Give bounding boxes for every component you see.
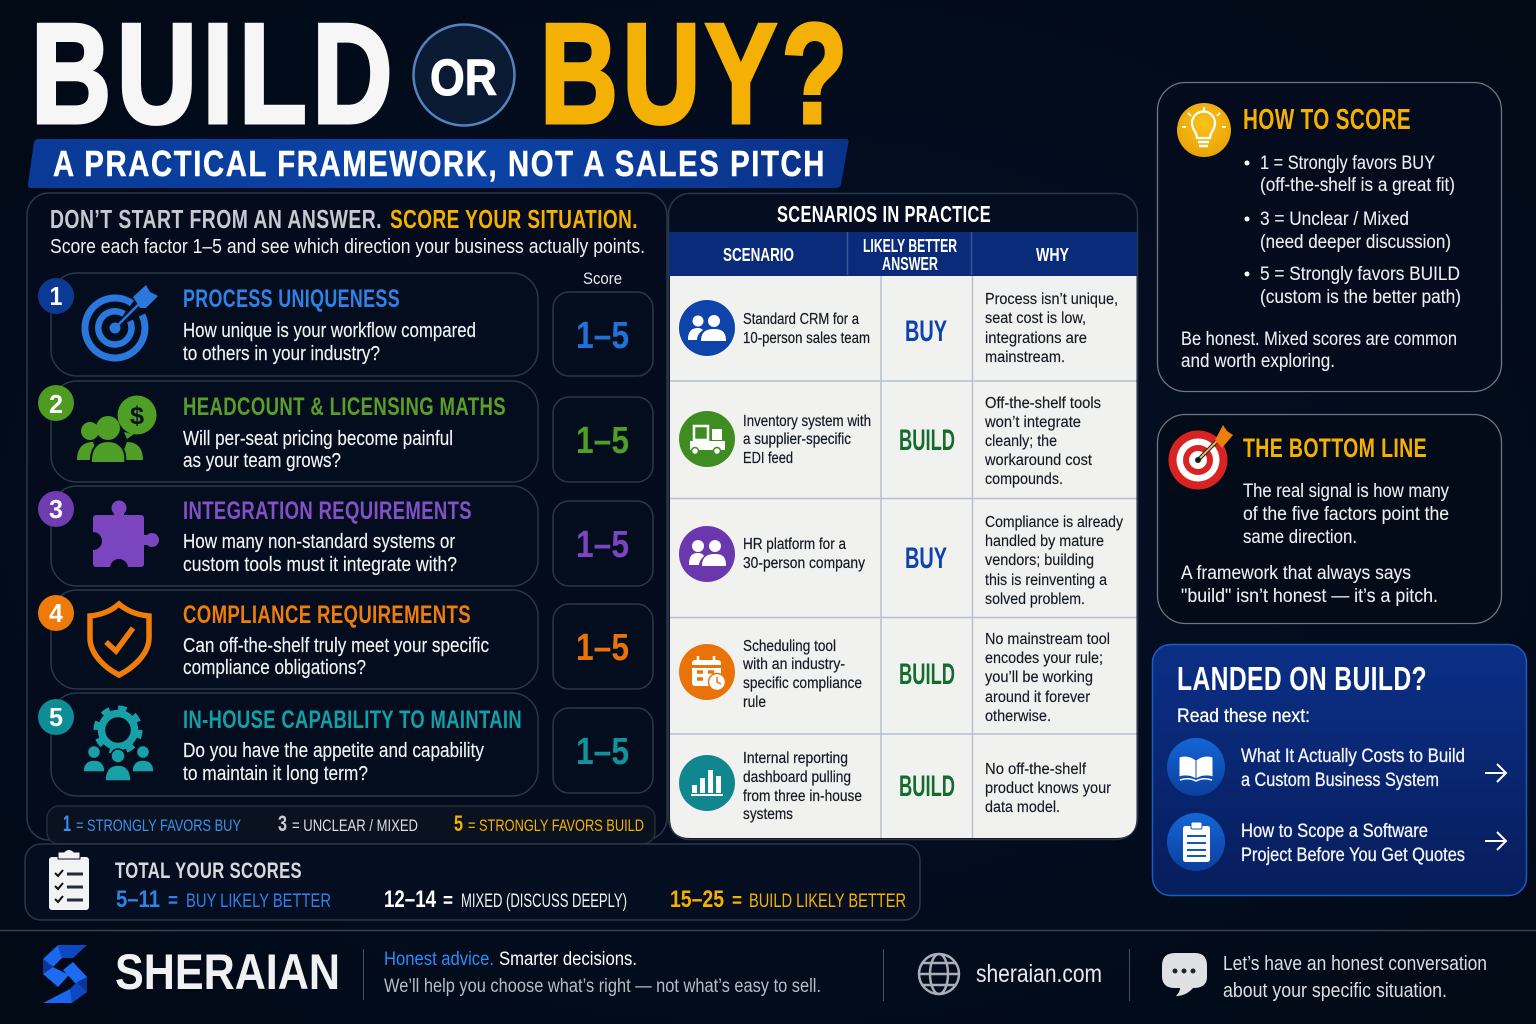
factor 1: process uniqueness (38, 273, 538, 376)
row 5: reporting dashboard: Internal reporting (743, 750, 848, 767)
factor 4: compliance requirements: COMPLIANCE REQUIREMENTS (183, 601, 471, 629)
factor 3: integration requirements (38, 486, 538, 586)
row 1: CRM (679, 291, 1118, 366)
subtitle banner (28, 139, 849, 188)
panel: total your scores: 15–25 (670, 886, 724, 913)
table title: SCENARIOS IN PRACTICE (777, 201, 991, 227)
table header row: SCENARIO (723, 245, 794, 265)
factor 4: compliance requirements: Can off-the-shelf truly meet your specific (183, 635, 489, 657)
footer: sheraian.com (976, 960, 1102, 988)
row 3: HR platform: BUY (905, 542, 947, 575)
icon: users blue (679, 300, 735, 356)
icon: globe (919, 954, 959, 994)
row 5: reporting dashboard (679, 750, 1111, 823)
icon: bullseye with dart (1168, 425, 1233, 490)
panel: how to score: and worth exploring. (1181, 351, 1335, 372)
panel: landed on build: Read these next: (1177, 706, 1310, 727)
panel: the bottom line: same direction. (1243, 527, 1357, 548)
row 2: inventory: cleanly; the (985, 433, 1057, 450)
link 1: costs to build (1167, 738, 1506, 796)
row 3: HR platform: HR platform for a (743, 536, 846, 553)
panel: the bottom line: of the five factors point the (1243, 504, 1449, 525)
row 4: scheduling tool: with an industry- (742, 656, 845, 673)
icon: team and dollar: $ (130, 402, 144, 430)
factor 4: compliance requirements: compliance obligations? (183, 657, 366, 679)
tagline (384, 949, 821, 997)
row 2: inventory: workaround cost (984, 452, 1093, 469)
factor 2: headcount and licensing (38, 381, 538, 482)
panel: total your scores: TOTAL YOUR SCORES (115, 858, 302, 883)
icon: clipboard (1167, 813, 1225, 871)
row 3: HR platform: solved problem. (985, 591, 1085, 608)
table header row: LIKELY BETTER (863, 236, 957, 256)
panel: the bottom line (1158, 414, 1502, 624)
row 2: inventory: a supplier-specific (743, 431, 851, 448)
score legend bar (47, 806, 655, 844)
panel: how to score (1158, 82, 1502, 392)
link 1: costs to build: What It Actually Costs to Build (1241, 746, 1465, 767)
row 4: scheduling tool: Scheduling tool (743, 638, 836, 655)
row 5: reporting dashboard: product knows your (985, 780, 1111, 797)
row 4: scheduling tool: you’ll be working (985, 669, 1093, 686)
row 2: inventory (679, 395, 1101, 488)
table header row (669, 232, 1137, 276)
row 2: inventory: compounds. (985, 471, 1063, 488)
row 4: scheduling tool: No mainstream tool (985, 631, 1110, 648)
scoring key list: 5 = Strongly favors BUILD (1260, 264, 1460, 285)
subtitle banner: A PRACTICAL FRAMEWORK, NOT A SALES PITCH (53, 143, 826, 184)
number badge 4: 4 (49, 598, 64, 628)
footer: Let’s have an honest conversation (1223, 953, 1487, 975)
factor 1: process uniqueness: How unique is your workflow compared (183, 320, 476, 342)
icon: forklift (679, 411, 735, 467)
scoring key list: 1 = Strongly favors BUY (1260, 153, 1435, 174)
number badge 5: 5 (49, 702, 63, 732)
OR badge (414, 24, 514, 126)
icon: target with arrow (85, 285, 158, 358)
factor 2: headcount and licensing: HEADCOUNT & LICENSING MATHS (183, 393, 506, 421)
score box 5 (553, 708, 653, 793)
scoring key list: 3 = Unclear / Mixed (1260, 209, 1409, 230)
icon: gear and people (83, 708, 154, 781)
row 5: reporting dashboard: No off-the-shelf (985, 761, 1087, 778)
row 4: scheduling tool: BUILD (899, 658, 955, 691)
factor 2: headcount and licensing: as your team grows? (183, 450, 341, 472)
score box 3: 1–5 (576, 524, 629, 566)
icon: checklist clipboard (49, 850, 89, 910)
number badge 5 (38, 699, 74, 735)
score box 1 (553, 292, 653, 376)
panel: the bottom line: A framework that always says (1181, 563, 1411, 584)
row 5: reporting dashboard: BUILD (899, 770, 955, 803)
factor 5: in-house capability: to maintain it long term? (183, 763, 368, 785)
row 2: inventory: BUILD (899, 424, 955, 457)
logo mark (43, 945, 87, 1003)
panel: total your scores: BUILD LIKELY BETTER (749, 891, 906, 912)
row 2: inventory: EDI feed (743, 450, 793, 467)
factor 3: integration requirements: custom tools must it integrate with? (183, 554, 457, 576)
panel: total your scores: MIXED (DISCUSS DEEPLY) (461, 891, 627, 912)
panel: total your scores: BUY LIKELY BETTER (186, 891, 331, 912)
row 5: reporting dashboard: systems (743, 806, 793, 823)
factor 4: compliance requirements (38, 590, 538, 689)
row 4: scheduling tool: around it forever (985, 689, 1090, 706)
icon: calendar and clock (679, 644, 735, 700)
score legend bar: 1 (63, 811, 71, 836)
row 1: CRM: Standard CRM for a (743, 311, 859, 328)
icon: speech bubble (1162, 953, 1207, 996)
icon: open book (1167, 738, 1225, 796)
panel: scoring factors (27, 193, 667, 844)
row 4: scheduling tool: rule (743, 694, 766, 711)
table header row: ANSWER (882, 254, 938, 274)
row 2: inventory: Inventory system with (743, 413, 871, 430)
score box 2: 1–5 (576, 420, 629, 462)
panel: total your scores: 5–11 (116, 886, 160, 913)
panel: the bottom line: THE BOTTOM LINE (1243, 433, 1427, 463)
factor 2: headcount and licensing: Will per-seat pricing become painful (183, 428, 453, 450)
row 4: scheduling tool (679, 631, 1110, 725)
factor 5: in-house capability (38, 693, 538, 796)
row 3: HR platform: Compliance is already (985, 514, 1123, 531)
score legend bar: = STRONGLY FAVORS BUY (76, 816, 241, 835)
row 2: inventory: won’t integrate (984, 414, 1081, 431)
panel: how to score: HOW TO SCORE (1243, 104, 1411, 136)
score box 2 (553, 397, 653, 482)
panel: total your scores: 12–14 (384, 886, 436, 913)
row 2: inventory: Off-the-shelf tools (985, 395, 1101, 412)
score legend bar: 3 (278, 811, 287, 836)
row 5: reporting dashboard: data model. (985, 799, 1060, 816)
score box 4: 1–5 (576, 627, 629, 669)
row 1: CRM: mainstream. (985, 349, 1065, 366)
panel heading (50, 204, 645, 258)
scoring key list: (need deeper discussion) (1260, 232, 1451, 253)
footer: about your specific situation. (1223, 980, 1447, 1002)
factor 5: in-house capability: IN-HOUSE CAPABILITY TO MAINTAIN (183, 706, 522, 734)
row 3: HR platform: this is reinventing a (985, 572, 1107, 589)
number badge 1: 1 (50, 281, 62, 311)
icon: bar chart (679, 755, 735, 811)
row 3: HR platform: 30-person company (743, 555, 865, 572)
panel: scenarios table (668, 194, 1138, 840)
panel heading: DON’T START FROM AN ANSWER. (50, 204, 382, 234)
panel: total your scores (25, 844, 920, 920)
link 2: scope a project: Project Before You Get Quotes (1241, 845, 1465, 866)
icon: puzzle piece (84, 500, 159, 577)
icon: team and dollar (77, 396, 156, 463)
link 2: scope a project (1167, 813, 1506, 871)
row 1: CRM: seat cost is low, (985, 310, 1086, 327)
scoring key list: (custom is the better path) (1260, 287, 1461, 308)
icon: users purple (679, 526, 735, 582)
panel: total your scores: = (168, 890, 178, 912)
footer: SHERAIAN (115, 944, 340, 1000)
scoring key list: (off-the-shelf is a great fit) (1260, 175, 1455, 196)
row 5: reporting dashboard: dashboard pulling (743, 769, 851, 786)
panel heading: SCORE YOUR SITUATION. (390, 204, 638, 234)
number badge 3: 3 (49, 494, 63, 524)
panel: the bottom line: "build" isn’t honest — it’s a pitch. (1181, 586, 1438, 607)
factor 5: in-house capability: Do you have the appetite and capability (183, 740, 484, 762)
row 4: scheduling tool: specific compliance (743, 675, 862, 692)
factor 1: process uniqueness: to others in your industry? (183, 343, 380, 365)
panel: how to score: Be honest. Mixed scores are common (1181, 329, 1457, 350)
arrow 1 (1485, 764, 1506, 782)
score box 1: 1–5 (576, 315, 629, 357)
row 1: CRM: BUY (905, 315, 947, 348)
scoring key list (1244, 153, 1461, 308)
icon: light bulb (1177, 103, 1231, 157)
OR badge: OR (430, 49, 497, 106)
factor 3: integration requirements: How many non-standard systems or (183, 531, 455, 553)
panel: landed on build (1152, 644, 1526, 896)
row 3: HR platform: handled by mature (985, 533, 1104, 550)
panel: the bottom line: The real signal is how many (1243, 481, 1449, 502)
panel heading: Score each factor 1–5 and see which direction your business actually points. (50, 236, 645, 258)
factor 1: process uniqueness: PROCESS UNIQUENESS (183, 285, 400, 313)
row 1: CRM: Process isn’t unique, (985, 291, 1118, 308)
arrow 2 (1485, 832, 1506, 850)
score box 5: 1–5 (576, 731, 629, 773)
table header row: WHY (1036, 245, 1069, 265)
row 5: reporting dashboard: from three in-house (743, 788, 862, 805)
score box 4 (553, 604, 653, 689)
tagline: Smarter decisions. (499, 949, 637, 970)
number badge 3 (38, 491, 74, 527)
row 3: HR platform: vendors; building (985, 552, 1094, 569)
score legend bar: = UNCLEAR / MIXED (292, 816, 418, 835)
row 4: scheduling tool: otherwise. (985, 708, 1051, 725)
score box 3 (553, 501, 653, 586)
link 2: scope a project: How to Scope a Software (1241, 821, 1428, 842)
number badge 1 (38, 278, 74, 314)
tagline: Honest advice. (384, 949, 494, 970)
row 4: scheduling tool: encodes your rule; (985, 650, 1103, 667)
score column label: Score (583, 270, 622, 288)
panel: total your scores: = (732, 890, 742, 912)
panel: landed on build: LANDED ON BUILD? (1177, 660, 1427, 697)
number badge 4 (38, 595, 74, 631)
footer (0, 930, 1536, 1003)
icon: shield with check (90, 604, 149, 675)
link 1: costs to build: a Custom Business System (1241, 770, 1439, 791)
number badge 2: 2 (49, 389, 63, 419)
factor 3: integration requirements: INTEGRATION REQUIREMENTS (183, 497, 472, 525)
panel: total your scores: = (443, 890, 453, 912)
row 1: CRM: integrations are (985, 330, 1087, 347)
number badge 2 (38, 385, 74, 421)
row 1: CRM: 10-person sales team (743, 330, 870, 347)
score legend bar: = STRONGLY FAVORS BUILD (468, 816, 644, 835)
tagline: We’ll help you choose what’s right — not what’s easy to sell. (384, 976, 821, 997)
title: BUILD OR BUY? (31, 0, 852, 154)
row 3: HR platform (679, 514, 1123, 608)
score legend bar: 5 (454, 811, 463, 836)
